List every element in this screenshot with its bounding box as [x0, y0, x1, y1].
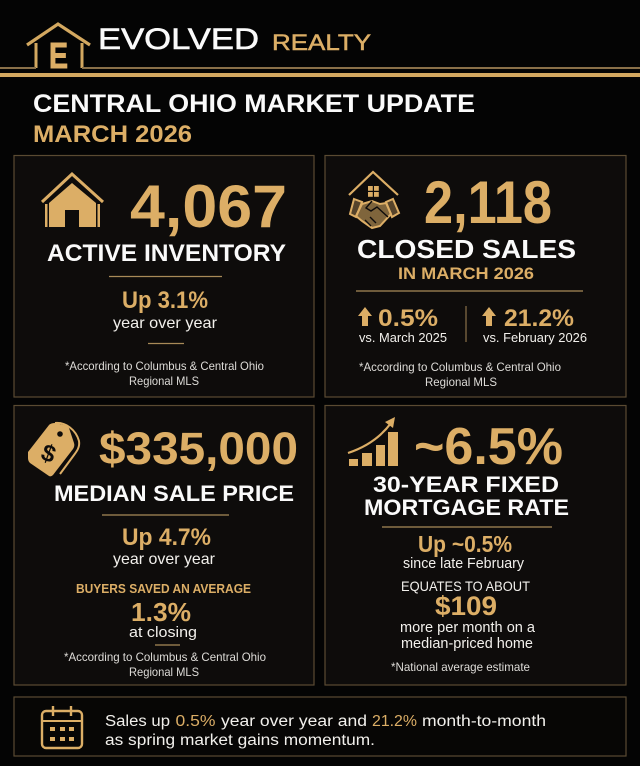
header: logo — [0, 23, 640, 77]
stat: versus February 2026: vs. February 2026 — [483, 330, 587, 345]
change period: since late February — [403, 555, 524, 572]
title: CENTRAL OHIO MARKET UPDATE — [33, 90, 475, 118]
equates value: $109 — [435, 591, 497, 621]
stat: versus March 2025 — [358, 305, 447, 345]
equates heading: EQUATES TO ABOUT — [401, 578, 530, 594]
summary text: year over year and — [221, 713, 367, 730]
icon: logo house — [27, 24, 90, 76]
footnote: Regional MLS — [129, 374, 199, 388]
equates caption: more per month on a — [400, 619, 536, 636]
panel: active inventory — [14, 156, 314, 397]
footnote: *According to Columbus & Central Ohio — [359, 360, 561, 374]
brand name: EVOLVED — [98, 23, 259, 56]
footnote: Regional MLS — [425, 375, 497, 389]
summary text — [105, 713, 546, 749]
stat: 2,118: 2,118 — [424, 169, 552, 236]
buyers saved caption: at closing — [129, 624, 197, 641]
icon: price tag: $ — [37, 439, 60, 469]
panel: mortgage rate — [325, 406, 626, 685]
label: 30-YEAR FIXED — [373, 472, 559, 497]
stat: versus February 2026: 21.2% — [504, 305, 574, 332]
stat: ~6.5%: ~6.5% — [414, 418, 563, 476]
footnote: *According to Columbus & Central Ohio — [64, 650, 266, 664]
label: MORTGAGE RATE — [364, 495, 569, 520]
subtitle: MARCH 2026 — [33, 121, 192, 148]
footnote: Regional MLS — [129, 665, 199, 679]
icon: logo house: E — [49, 35, 68, 76]
stat: 4,067: 4,067 — [130, 173, 287, 240]
footnote: *National average estimate — [391, 660, 530, 674]
icon: up arrow — [358, 307, 372, 326]
brand suffix: REALTY — [272, 30, 371, 55]
change: Up 3.1% — [122, 287, 208, 314]
summary text: month-to-month — [422, 713, 546, 730]
label: CLOSED SALES — [357, 234, 576, 264]
buyers saved value: 1.3% — [131, 597, 191, 627]
icon: up arrow — [482, 307, 496, 326]
equates caption: median-priced home — [401, 635, 533, 652]
footnote: *According to Columbus & Central Ohio — [65, 359, 264, 373]
summary text: Sales up — [105, 713, 170, 730]
stat: versus March 2025: 0.5% — [378, 305, 438, 332]
icon: price tag — [28, 423, 79, 476]
panel: closed sales — [325, 156, 626, 397]
summary text: 21.2% — [372, 713, 417, 730]
icon: house — [42, 174, 103, 227]
change period: year over year — [113, 551, 216, 568]
panel: median sale price — [14, 406, 314, 685]
panel: summary callout — [14, 697, 626, 756]
icon: house and handshake — [349, 172, 399, 228]
icon: calendar — [42, 706, 82, 748]
sublabel: IN MARCH 2026 — [398, 264, 534, 283]
summary text: 0.5% — [176, 713, 216, 730]
label: MEDIAN SALE PRICE — [54, 481, 294, 506]
change: Up 4.7% — [122, 524, 211, 551]
stat: versus March 2025: vs. March 2025 — [359, 330, 447, 345]
buyers saved heading: BUYERS SAVED AN AVERAGE — [76, 581, 251, 596]
change period: year over year — [113, 315, 218, 332]
icon: rising bar chart — [348, 417, 398, 466]
summary text: as spring market gains momentum. — [105, 732, 375, 749]
change: Up ~0.5% — [418, 531, 512, 557]
logo rules — [0, 67, 640, 77]
stat: versus February 2026 — [482, 305, 587, 345]
stat: $335,000: $335,000 — [99, 423, 298, 474]
label: ACTIVE INVENTORY — [47, 240, 286, 267]
